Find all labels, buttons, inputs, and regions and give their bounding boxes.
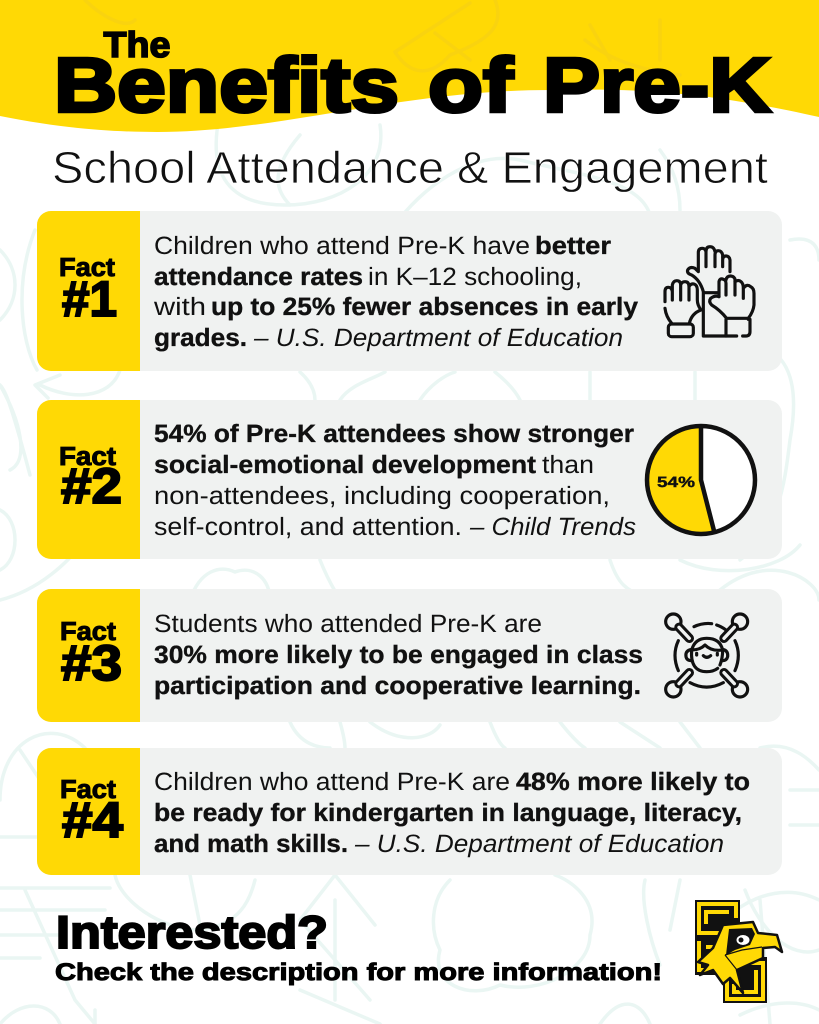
fact 2 label	[59, 441, 122, 514]
fact 4 text: be ready for kindergarten in language, literacy,	[154, 799, 742, 827]
fact 2 text: – Child Trends	[469, 513, 636, 541]
fact 3 text	[154, 610, 643, 700]
fact 3 text: Students who attended Pre-K are	[154, 610, 542, 638]
title: Pre-K	[543, 42, 771, 128]
fact 2 text: social-emotional development	[154, 451, 537, 479]
logo: S with eagle	[695, 900, 782, 1003]
pie chart: 54%: 54%	[657, 474, 695, 491]
fact 3 label	[60, 616, 122, 691]
fact 1 text: – U.S. Department of Education	[253, 324, 623, 352]
fact 1 text: with	[153, 293, 206, 321]
fact 1 text: better	[535, 232, 611, 260]
panel: fact 1	[37, 211, 782, 371]
fact 1 text: grades.	[154, 324, 247, 352]
fact 3 text: 30% more likely to be engaged in class	[154, 641, 643, 669]
fact 1 text: attendance rates	[154, 263, 363, 291]
fact 2 text: non-attendees, including cooperation,	[154, 482, 610, 510]
title	[54, 24, 771, 128]
fact 3 label: #3	[61, 635, 122, 691]
fact 1 text: in K–12 schooling,	[368, 263, 582, 291]
fact 2 text	[154, 420, 636, 541]
icon: raised hands	[665, 247, 754, 337]
subtitle: School Attendance & Engagement	[52, 142, 769, 193]
fact 2 text: self-control, and attention.	[154, 513, 462, 541]
fact 2 text: 54% of Pre-K attendees show stronger	[154, 420, 634, 448]
fact 2 label: Fact	[59, 441, 116, 471]
fact 4 text: – U.S. Department of Education	[354, 830, 724, 858]
fact 1 label: #1	[62, 271, 117, 327]
pie chart: 54%	[647, 426, 755, 534]
title: The	[104, 24, 170, 65]
fact 3 label: Fact	[60, 616, 116, 646]
panel: fact 3	[37, 589, 782, 722]
fact 4 text: Children who attend Pre-K are	[154, 768, 510, 796]
fact 2 text: than	[542, 451, 594, 479]
fact 4 label: Fact	[60, 774, 116, 804]
fact 1 text: Children who attend Pre-K have	[154, 232, 530, 260]
fact 4 label: #4	[62, 792, 123, 848]
icon: connected child	[666, 614, 748, 697]
footer call to action: Check the description for more information!	[55, 959, 662, 986]
footer call to action: Interested?	[56, 906, 328, 958]
title: Benefits	[54, 42, 399, 128]
fact 4 label	[60, 774, 123, 848]
panel: fact 2	[37, 400, 782, 559]
fact 2 label: #2	[61, 458, 122, 514]
title: of	[428, 42, 513, 128]
fact 1 label: Fact	[59, 252, 115, 282]
yellow wave header	[0, 0, 819, 132]
fact 4 text: 48% more likely to	[516, 768, 750, 796]
fact 3 text: participation and cooperative learning.	[154, 672, 641, 700]
fact 1 text	[153, 232, 638, 352]
fact 1 text: up to 25% fewer absences in early	[211, 293, 638, 321]
panel: fact 4	[37, 748, 782, 875]
fact 4 text: and math skills.	[154, 830, 348, 858]
footer call to action	[55, 906, 662, 986]
fact 4 text	[154, 768, 750, 858]
